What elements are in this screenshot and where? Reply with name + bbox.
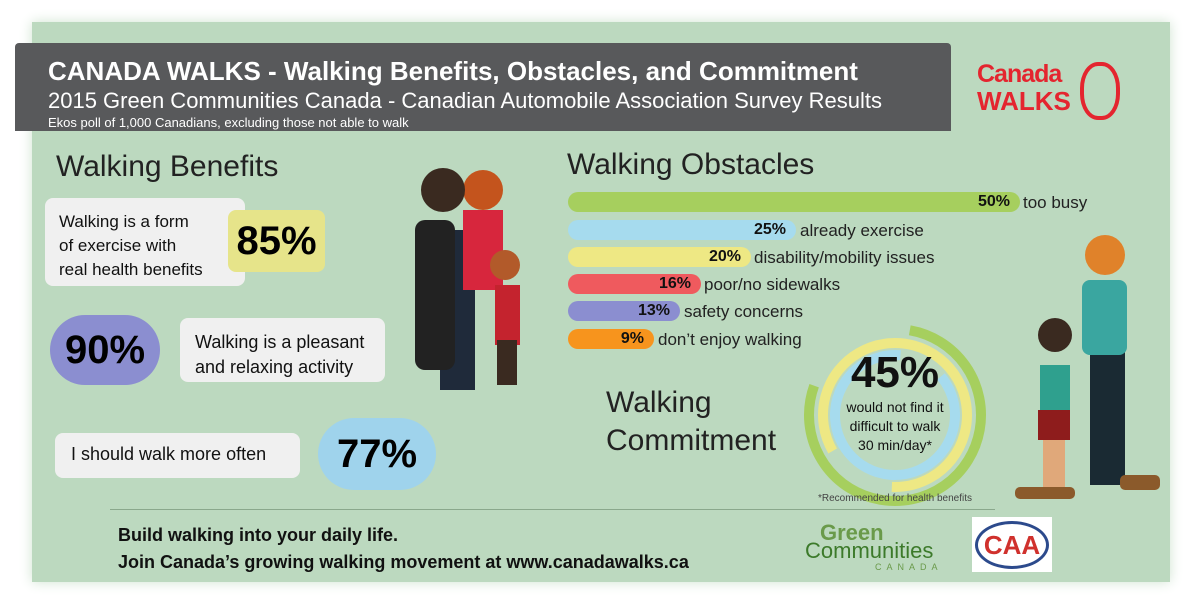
logo: CAA	[972, 517, 1052, 572]
bar chart: obstacles: 16%	[659, 275, 691, 292]
logo: Canada Walks: Canada	[977, 60, 1061, 88]
header banner	[15, 43, 951, 131]
bar chart: obstacles: don’t enjoy walking	[658, 330, 802, 349]
ring chart: 45%: 45%	[851, 348, 939, 397]
bar chart: obstacles: 13%	[638, 302, 670, 319]
bar chart: obstacles: poor/no sidewalks	[704, 275, 840, 294]
bar chart: obstacles: too busy	[1023, 193, 1087, 212]
bar chart: obstacles	[568, 192, 1088, 349]
bar chart: obstacles: 25%	[754, 221, 786, 238]
bar chart: obstacles: 20%	[709, 248, 741, 265]
logo: Green Communities Canada: CANADA	[875, 562, 943, 572]
call to action	[118, 525, 689, 572]
note: Ekos poll of 1,000 Canadians, excluding those not able to walk	[48, 115, 409, 130]
ring chart: 45%: would not find it	[846, 399, 944, 415]
divider	[110, 509, 995, 510]
benefit 1: Walking is a form	[59, 212, 189, 231]
bar chart: obstacles: already exercise	[800, 221, 924, 240]
bar chart: obstacles: safety concerns	[684, 302, 803, 321]
subtitle: 2015 Green Communities Canada - Canadian Automobile Association Survey Results	[48, 88, 882, 113]
logo: Canada Walks	[977, 60, 1120, 120]
heading: Walking Benefits: Walking Benefits	[56, 150, 278, 183]
logo: CAA: CAA	[984, 530, 1040, 560]
benefit 2	[50, 315, 385, 385]
benefit 2: 90%	[65, 328, 145, 372]
logo: Green Communities Canada: Communities	[805, 538, 933, 563]
heading: Walking Obstacles: Walking Obstacles	[567, 148, 814, 181]
title: CANADA WALKS - Walking Benefits, Obstacles, and Commitment	[48, 56, 858, 86]
benefit 1	[45, 198, 325, 286]
benefit 3	[55, 418, 436, 490]
bar chart: obstacles: disability/mobility issues	[754, 248, 934, 267]
ring chart: 45%	[804, 325, 986, 506]
heading: Walking Commitment: Walking	[606, 386, 712, 419]
logo: Canada Walks: WALKS	[977, 86, 1071, 116]
footnote: *Recommended for health benefits	[818, 493, 972, 504]
benefit 1: 85%	[236, 219, 317, 263]
benefit 3: 77%	[337, 432, 417, 476]
illustration: family walking	[415, 168, 520, 390]
bar chart: obstacles: 50%	[978, 193, 1010, 210]
benefit 1: of exercise with	[59, 236, 176, 255]
call to action: Build walking into your daily life.	[118, 525, 398, 545]
logo: Green Communities Canada	[805, 520, 943, 572]
bar chart: obstacles: 9%	[621, 330, 644, 347]
heading: Walking Commitment: Commitment	[606, 424, 776, 457]
benefit 3: I should walk more often	[71, 444, 266, 464]
illustration: mother and daughter	[1015, 235, 1160, 499]
benefit 1: real health benefits	[59, 260, 203, 279]
call to action: Join Canada’s growing walking movement at www.canadawalks.ca	[118, 552, 689, 572]
heading: Walking Commitment	[606, 386, 776, 457]
benefit 2: and relaxing activity	[195, 357, 353, 377]
logo: Green Communities Canada: Green	[820, 520, 884, 545]
ring chart: 45%: difficult to walk	[850, 418, 940, 434]
benefit 2: Walking is a pleasant	[195, 332, 364, 352]
ring chart: 45%: 30 min/day*	[858, 437, 932, 453]
